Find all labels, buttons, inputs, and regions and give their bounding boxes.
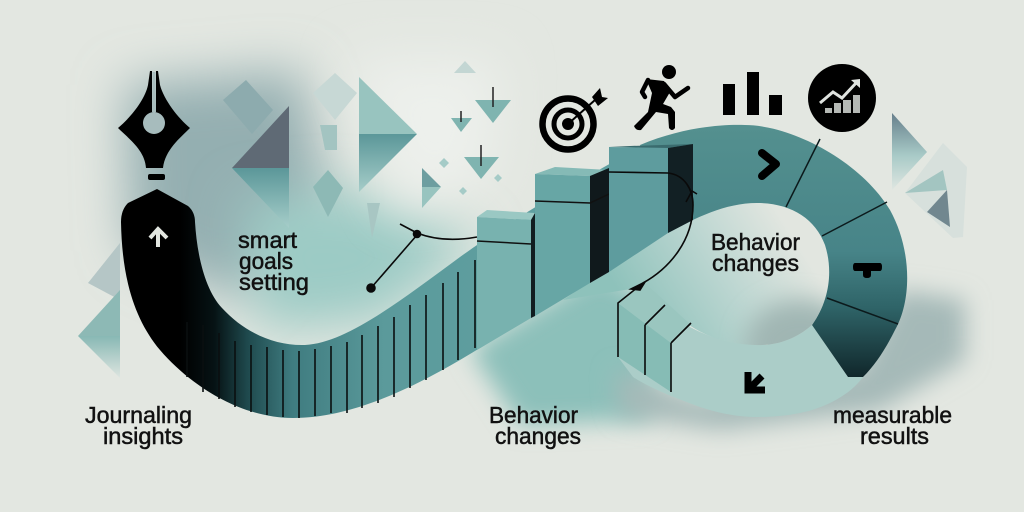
- inner blob: [564, 203, 830, 345]
- icon: chevron: [762, 153, 776, 176]
- label: Behavior changes lower: [489, 402, 581, 449]
- icon: corner arrow: [748, 372, 765, 390]
- decorative triangles and arrows: centre cluster: [422, 61, 511, 208]
- light band lower ribbon: [618, 287, 863, 417]
- label: Behavior changes centre: Behavior: [711, 229, 800, 255]
- decorative triangles: left cluster: [78, 73, 417, 378]
- label: Behavior changes centre: [711, 229, 800, 276]
- label: smart goals setting: setting: [239, 269, 309, 295]
- label: Behavior changes lower: changes: [495, 423, 581, 449]
- icon: growth chart in circle: [808, 64, 876, 132]
- ribbon: left rising section: [121, 142, 668, 418]
- stair block: [618, 283, 691, 392]
- tick marks on ribbon: [187, 260, 475, 418]
- label: Journaling insights: insights: [103, 423, 183, 449]
- label: smart goals setting: smart: [238, 227, 298, 253]
- decorative triangles: right cluster: [892, 113, 967, 238]
- icon: target: [542, 88, 608, 150]
- curved arrow through bars: [609, 172, 697, 392]
- label: measurable results: measurable: [833, 402, 952, 428]
- bar 2: [535, 167, 609, 316]
- background halos: [125, 60, 965, 430]
- ribbon: right segmented arc: [640, 125, 907, 377]
- label: Journaling insights: [85, 402, 192, 449]
- label: Journaling insights: Journaling: [85, 402, 192, 428]
- icon: tee: [853, 263, 882, 278]
- icon: runner: [634, 65, 688, 130]
- label: measurable results: [833, 402, 952, 449]
- small arrow: dot to curve: [367, 224, 477, 292]
- bar 1: [477, 210, 535, 350]
- label: smart goals setting: goals: [239, 248, 293, 274]
- label: smart goals setting: [238, 227, 309, 295]
- label: Behavior changes lower: Behavior: [489, 402, 578, 428]
- icon: bar chart: [723, 72, 782, 115]
- icon: fountain pen nib: [118, 71, 190, 180]
- label: Behavior changes centre: changes: [712, 250, 799, 276]
- bar 3: [609, 144, 693, 272]
- icon: up arrow: [150, 229, 167, 247]
- label: measurable results: results: [860, 423, 929, 449]
- arc divider lines: [786, 139, 898, 324]
